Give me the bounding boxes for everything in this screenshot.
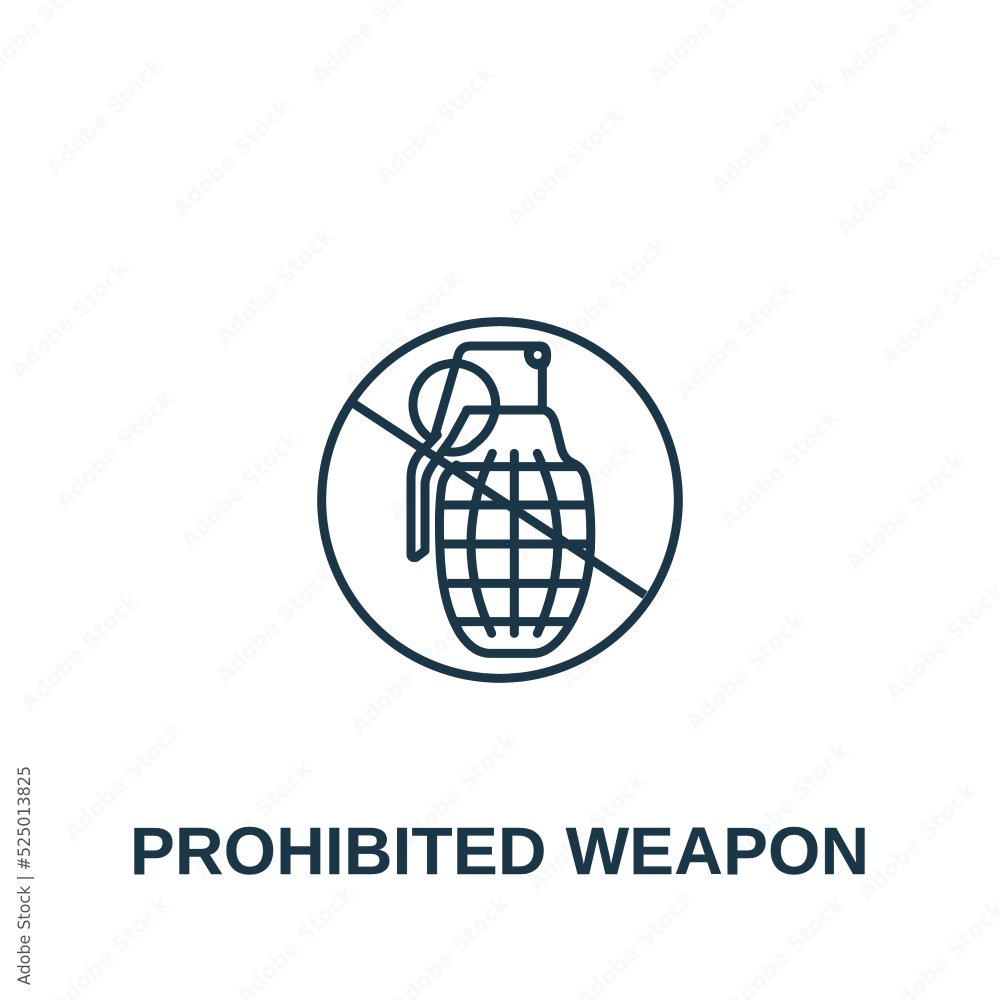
- watermark pattern: Adobe Stock: [717, 406, 845, 534]
- watermark pattern: Adobe Stock: [682, 608, 810, 736]
- watermark pattern: Adobe Stock: [372, 61, 500, 189]
- watermark pattern: Adobe Stock: [17, 588, 145, 716]
- watermark pattern: Adobe Stock: [727, 738, 855, 866]
- watermark pattern: Adobe Stock: [7, 256, 135, 384]
- grenade ring: [413, 363, 496, 452]
- watermark pattern: Adobe Stock: [672, 276, 800, 404]
- watermark pattern: Adobe Stock: [557, 566, 685, 694]
- prohibition slash: [353, 403, 645, 595]
- watermark pattern: Adobe Stock: [545, 233, 673, 361]
- watermark pattern: Adobe Stock: [340, 266, 468, 394]
- watermark pattern: Adobe Stock: [854, 778, 982, 906]
- watermark pattern: Adobe Stock: [42, 53, 170, 181]
- grenade grid verticals: [471, 453, 558, 633]
- grenade body outline: [439, 410, 591, 653]
- prohibition circle: [322, 322, 678, 678]
- watermark pattern: Adobe Stock: [212, 561, 340, 689]
- watermark pattern: Adobe Stock: [60, 718, 188, 846]
- watermark pattern: Adobe Stock: [394, 728, 522, 856]
- watermark pattern: Adobe Stock: [190, 756, 318, 884]
- watermark pattern: Adobe Stock: [502, 103, 630, 231]
- title: PROHIBITED WEAPON: [130, 814, 869, 889]
- grenade grid horizontals: [442, 467, 589, 622]
- stock id label: Adobe Stock | #525013825: [15, 766, 35, 985]
- grenade lever: [411, 411, 467, 558]
- pin hole: [531, 348, 544, 362]
- watermark pattern: Adobe Stock: [212, 223, 340, 351]
- grenade cap and spoon: [434, 346, 547, 438]
- watermark pattern: Adobe Stock: [52, 386, 180, 514]
- watermark pattern: Adobe Stock: [384, 396, 512, 524]
- watermark pattern: Adobe Stock: [177, 426, 305, 554]
- watermark pattern: Adobe Stock: [842, 448, 970, 576]
- watermark pattern: Adobe Stock: [707, 71, 835, 199]
- watermark pattern: Adobe Stock: [169, 94, 297, 222]
- watermark pattern: Adobe Stock: [524, 768, 652, 896]
- watermark pattern: Adobe Stock: [512, 436, 640, 564]
- watermark pattern: Adobe Stock: [832, 114, 960, 242]
- icon: prohibited grenade: [322, 322, 678, 678]
- watermark pattern: Adobe Stock: [347, 611, 475, 739]
